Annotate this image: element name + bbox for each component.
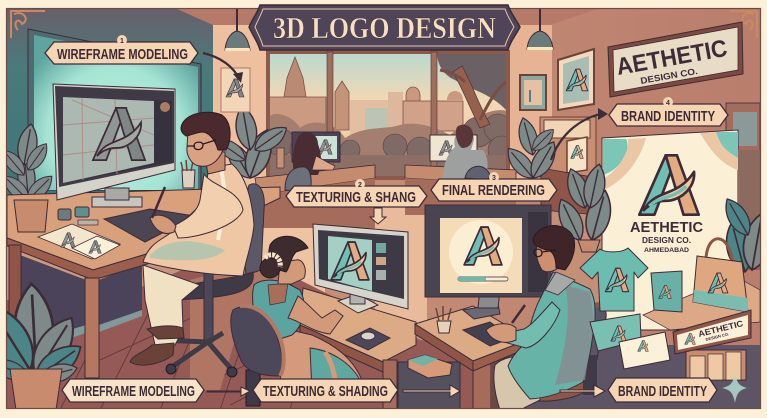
teal wall [7, 8, 213, 205]
bottom-left plant [0, 283, 88, 388]
arrow to rendering [403, 385, 460, 397]
sign: Aethetic Design Co: DESIGN CO. [640, 66, 698, 86]
bottom label wireframe [62, 379, 204, 402]
step label 2 [286, 179, 427, 207]
bottom right slate floor [490, 345, 760, 410]
sky [270, 54, 506, 138]
shopping bag [693, 239, 748, 312]
wall between window and corner [508, 25, 552, 178]
torso shadow [555, 285, 594, 385]
peach wall behind woman [262, 228, 325, 292]
step label 4: 4 [666, 100, 670, 107]
peach wall between monitors [375, 205, 427, 330]
peach wall left of window [213, 25, 266, 188]
step label 3: FINAL RENDERING [442, 182, 545, 199]
poster name: AETHETIC [630, 220, 704, 236]
centre desk [300, 288, 416, 410]
books [408, 355, 452, 378]
mullion right [431, 52, 437, 177]
cityscape [266, 52, 516, 178]
notebook [651, 271, 682, 312]
bottom label wireframe: WIREFRAME MODELING [72, 383, 195, 400]
hair [181, 112, 230, 150]
viewport grid [63, 98, 154, 180]
arrow step 1 [203, 53, 240, 80]
material ball [160, 102, 170, 112]
neck [204, 152, 225, 174]
mug [437, 321, 451, 333]
small wall frame [520, 75, 546, 110]
woman designer [253, 236, 361, 392]
arm [288, 296, 343, 334]
sparkle [722, 373, 747, 403]
mullion [327, 52, 333, 177]
hanging lamp left [225, 8, 250, 51]
poster location: AHMEDABAD [644, 248, 690, 254]
bottom label texturing: TEXTURING & SHADING [263, 383, 388, 400]
wireframe logo [93, 108, 145, 160]
placket [212, 160, 226, 240]
plant between monitor and poster [552, 188, 616, 252]
step label 1 [45, 35, 198, 64]
bottom label brand: BRAND IDENTITY [618, 383, 707, 400]
poster teal corner right [716, 132, 738, 160]
corner ornament left [10, 11, 45, 38]
sign: Aethetic Design Co [608, 22, 743, 97]
t-shirt [580, 248, 648, 311]
arrow to texturing [207, 387, 250, 396]
floor boards [7, 300, 300, 410]
arrow to brand bottom [560, 385, 605, 397]
corner ornament right [730, 11, 757, 38]
title text: 3D LOGO DESIGN [273, 10, 496, 45]
face [187, 126, 224, 166]
step label 2: TEXTURING & SHANG [296, 189, 416, 206]
big tree foliage [437, 52, 508, 112]
window frame [268, 52, 508, 178]
arrow head brand [598, 108, 608, 120]
arm [504, 302, 560, 348]
shirt [143, 164, 254, 276]
designer chair [160, 184, 264, 377]
trees low [270, 110, 506, 155]
monitor main [53, 84, 175, 207]
left plant [7, 123, 52, 194]
back desk right [405, 125, 516, 215]
hair [269, 236, 308, 272]
sign: Aethetic Design Co: AETHETIC [614, 35, 729, 81]
back wall [7, 9, 760, 345]
hand [486, 324, 516, 342]
back centre plant [222, 112, 288, 179]
tablet [104, 209, 195, 242]
collar [545, 272, 575, 295]
business cards [590, 314, 670, 369]
desk sketches [38, 224, 120, 259]
back woman [293, 132, 321, 175]
sari stripe [325, 352, 336, 392]
step label 4 [609, 97, 728, 126]
pencil cup [181, 160, 195, 188]
sari lower [280, 328, 361, 392]
right man figure [486, 226, 595, 410]
right monitor [425, 205, 551, 319]
bushes [271, 114, 506, 155]
front leg [85, 278, 99, 378]
glowing panel inner [34, 35, 198, 190]
arrow down [370, 208, 386, 224]
under desk dark [20, 255, 86, 345]
poster teal corners [603, 139, 628, 175]
bottom label texturing [253, 379, 398, 402]
back desk left [255, 132, 375, 228]
stylus [152, 187, 165, 218]
step label 4: BRAND IDENTITY [621, 108, 715, 125]
main desk [7, 187, 280, 378]
shoes [147, 326, 184, 339]
back leg [9, 245, 21, 375]
designer figure [130, 112, 254, 365]
back monitor man [430, 135, 477, 161]
trousers [143, 265, 200, 345]
sideboard with frames [540, 117, 598, 215]
hand [150, 215, 176, 233]
desk jars [58, 207, 98, 225]
keyboard [463, 322, 512, 346]
right plant by frames [508, 117, 556, 178]
centre monitor [313, 224, 408, 313]
poster subtitle: DESIGN CO. [642, 235, 691, 245]
desktop [7, 187, 280, 270]
glowing teal panel [28, 29, 201, 190]
left pot [14, 200, 48, 232]
drawer [398, 362, 460, 410]
step label 1: 1 [120, 38, 124, 45]
step label 3 [431, 172, 557, 201]
storefront: AETHETIC [697, 318, 744, 339]
baseboard [20, 325, 86, 355]
back skin [268, 283, 288, 305]
monitor viewport [63, 97, 154, 183]
peach wall behind right man [552, 212, 602, 302]
sleeve [173, 174, 243, 238]
torso [253, 280, 304, 345]
storefront: DESIGN CO. [705, 331, 730, 342]
plant right of poster [719, 150, 767, 275]
step label 3: 3 [492, 175, 496, 182]
poster [602, 130, 738, 330]
light floor patch [190, 262, 300, 390]
face [536, 242, 565, 272]
woman chair [231, 306, 284, 406]
ceiling [178, 9, 595, 25]
floor [7, 250, 760, 410]
hanging lamp right [527, 8, 553, 50]
storefront [673, 310, 751, 380]
poster logo [639, 155, 699, 215]
plant below frames [562, 162, 609, 211]
glasses [534, 249, 556, 257]
right wall frame [726, 103, 760, 153]
arrow head 1 [233, 72, 243, 83]
title banner [249, 5, 520, 50]
back monitor woman [292, 132, 340, 162]
right desk [398, 306, 530, 410]
hair [533, 226, 575, 270]
bun [260, 258, 280, 278]
torso [508, 272, 595, 399]
step label 2: 2 [358, 182, 362, 189]
poster wash [604, 132, 738, 190]
bottom-left pot [10, 369, 62, 410]
step label 1: WIREFRAME MODELING [57, 46, 188, 63]
framed wireframe poster [221, 68, 250, 112]
back man [442, 134, 488, 178]
arrow to brand identity [551, 114, 600, 160]
shirt shadow [150, 241, 225, 260]
glasses [187, 140, 216, 150]
right man chair [516, 303, 606, 401]
window [266, 52, 516, 178]
bottom label brand [608, 378, 717, 402]
right display table [643, 276, 760, 330]
stylus [512, 305, 525, 323]
neck and face [278, 260, 305, 284]
framed logo on wall [558, 49, 594, 110]
trousers [494, 357, 540, 410]
